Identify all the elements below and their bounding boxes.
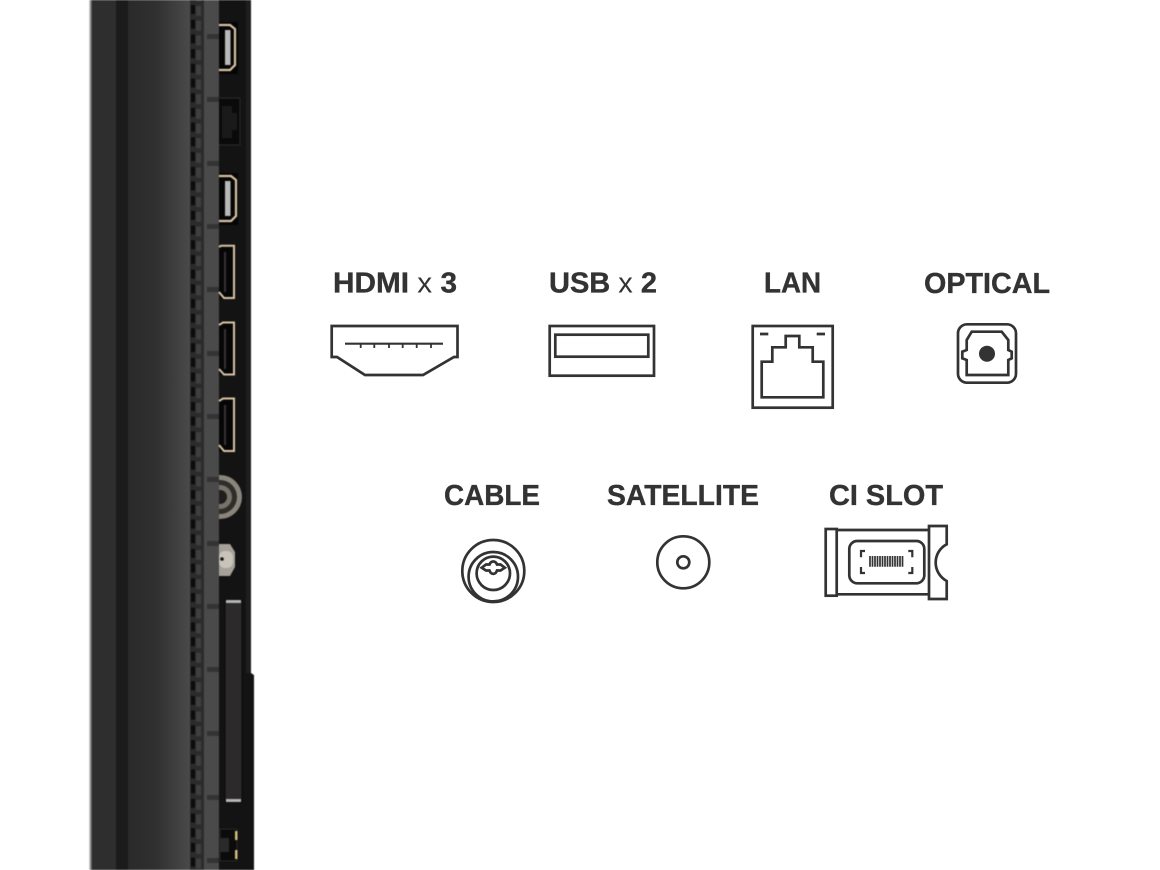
label: OPTICAL: OPTICAL bbox=[924, 268, 1050, 300]
connector: SATELLITE bbox=[607, 480, 759, 588]
connector: USB x 2 bbox=[549, 268, 657, 376]
TV side profile bbox=[89, 0, 254, 870]
connector: CABLE bbox=[444, 480, 540, 602]
icon: cable bbox=[462, 540, 524, 602]
label: CI SLOT: CI SLOT bbox=[829, 480, 944, 512]
label: LAN: LAN bbox=[764, 268, 821, 300]
port: CI slot bbox=[225, 600, 242, 802]
label: HDMI x 3: HDMI x 3 bbox=[333, 268, 457, 300]
port: USB 2 bbox=[219, 173, 238, 225]
icon: USB bbox=[550, 326, 654, 376]
connector: HDMI x 3 bbox=[332, 268, 458, 375]
port: HDMI 3 bbox=[219, 398, 235, 452]
port: USB 1 bbox=[219, 22, 238, 74]
connector: CI SLOT bbox=[826, 480, 947, 599]
port: HDMI 2 bbox=[219, 322, 235, 375]
icon: CI slot bbox=[826, 526, 947, 599]
icon: LAN bbox=[753, 326, 833, 408]
port: satellite bbox=[219, 544, 235, 576]
icon: HDMI bbox=[332, 326, 458, 375]
port: LAN bbox=[219, 97, 241, 146]
label: USB x 2: USB x 2 bbox=[549, 268, 657, 300]
label: SATELLITE: SATELLITE bbox=[607, 480, 759, 512]
icon: satellite bbox=[657, 536, 709, 588]
port: optical bbox=[219, 828, 238, 862]
connector: OPTICAL bbox=[924, 268, 1050, 383]
icon: optical bbox=[958, 324, 1016, 383]
label: CABLE: CABLE bbox=[444, 480, 540, 512]
connector: LAN bbox=[753, 268, 833, 408]
port: HDMI 1 bbox=[219, 245, 235, 299]
port: cable coaxial bbox=[218, 474, 243, 520]
